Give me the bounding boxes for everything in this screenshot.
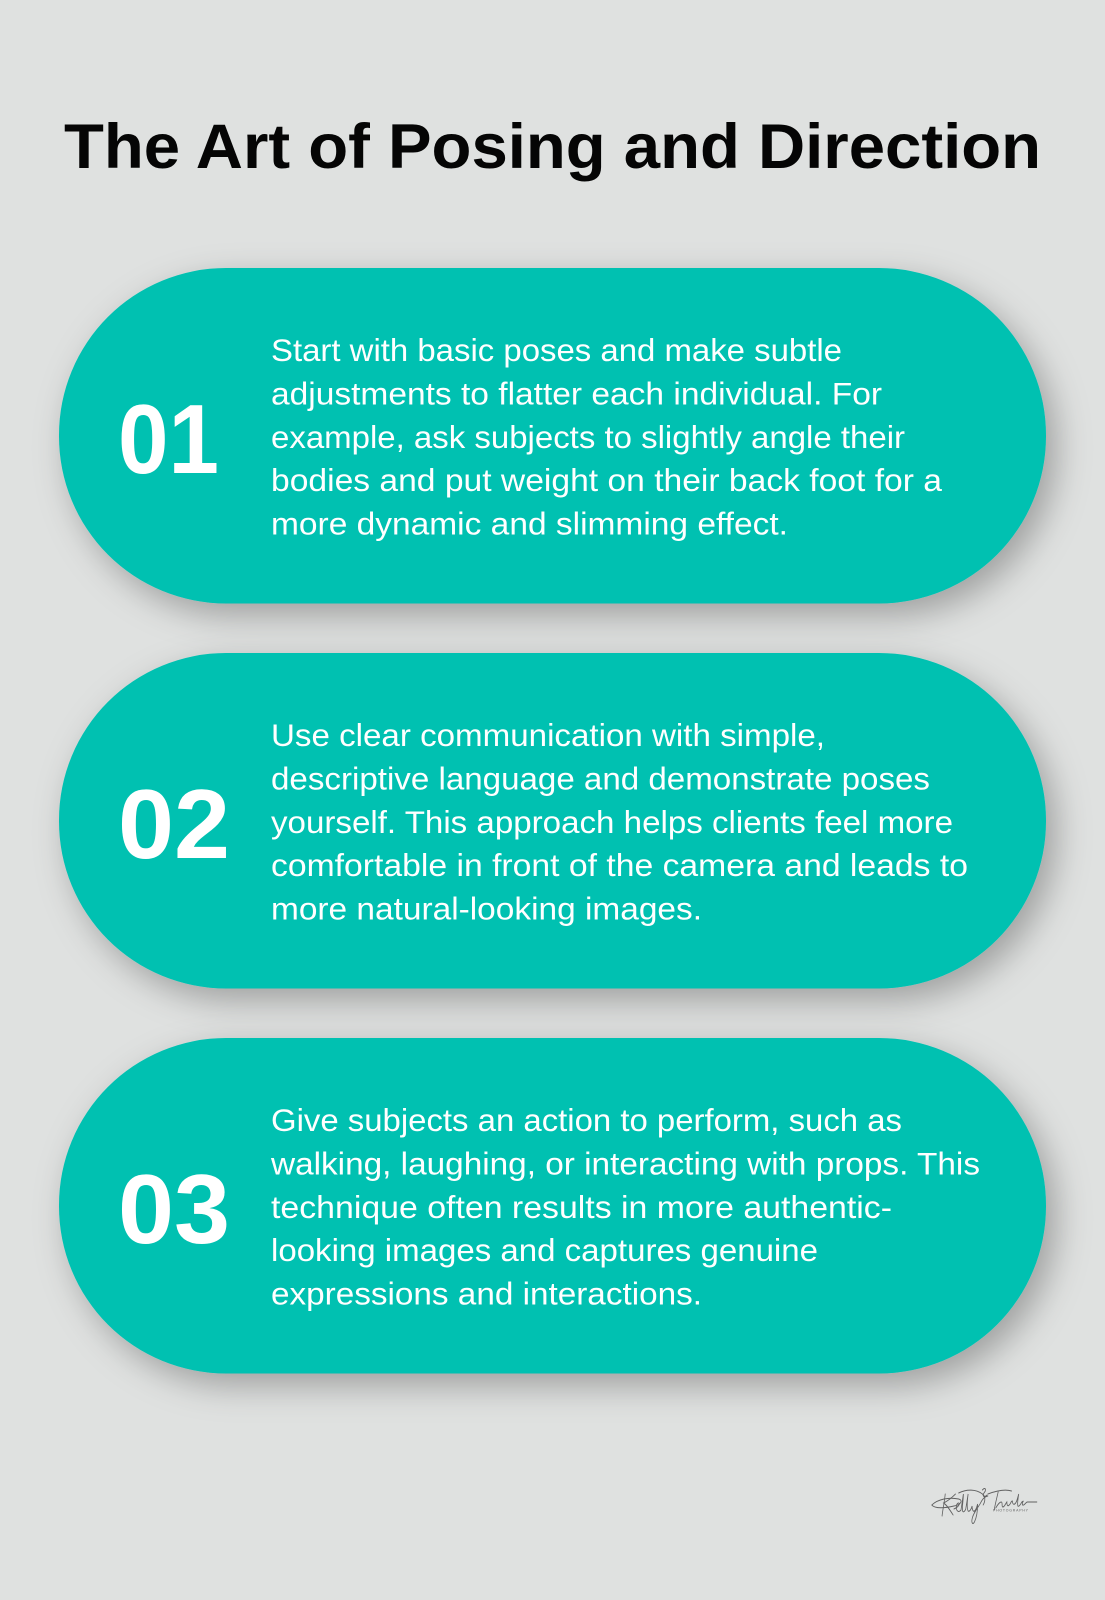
- step 03 text: technique often results in more authentic-: [271, 1189, 892, 1225]
- panel: step 03: [59, 1038, 1046, 1374]
- step 02 text: [271, 717, 968, 926]
- number 03: 03: [118, 1154, 230, 1264]
- step 01 text: Start with basic poses and make subtle: [271, 332, 842, 368]
- step 01 text: [271, 332, 943, 542]
- logo: signature: [932, 1488, 1037, 1523]
- step 03 text: [270, 1102, 980, 1312]
- step 01 text: bodies and put weight on their back foot for a: [271, 462, 943, 498]
- step 01 text: adjustments to flatter each individual. For: [271, 376, 882, 412]
- panel: step 01: [59, 268, 1046, 604]
- step 02 text: descriptive language and demonstrate poses: [271, 760, 930, 796]
- logo: signature: PHOTOGRAPHY: [993, 1508, 1029, 1512]
- step 03 text: walking, laughing, or interacting with props. This: [270, 1146, 980, 1182]
- step 02 text: Use clear communication with simple,: [271, 717, 825, 753]
- step 01 text: example, ask subjects to slightly angle their: [271, 419, 905, 455]
- step 03 text: expressions and interactions.: [271, 1276, 702, 1312]
- card shape: [59, 653, 1046, 988]
- card shape: [59, 268, 1046, 604]
- step 03 text: Give subjects an action to perform, such as: [271, 1102, 902, 1138]
- card shape: [59, 1038, 1046, 1374]
- number 02: 02: [118, 769, 230, 879]
- step 02 text: comfortable in front of the camera and leads to: [271, 847, 968, 883]
- step 02 text: yourself. This approach helps clients feel more: [271, 804, 953, 840]
- title: The Art of Posing and Direction: [64, 112, 1041, 182]
- step 01 text: more dynamic and slimming effect.: [271, 506, 788, 542]
- step 03 text: looking images and captures genuine: [271, 1232, 818, 1268]
- panel: step 02: [59, 653, 1046, 988]
- number 01: 01: [118, 384, 219, 494]
- step 02 text: more natural-looking images.: [271, 890, 702, 926]
